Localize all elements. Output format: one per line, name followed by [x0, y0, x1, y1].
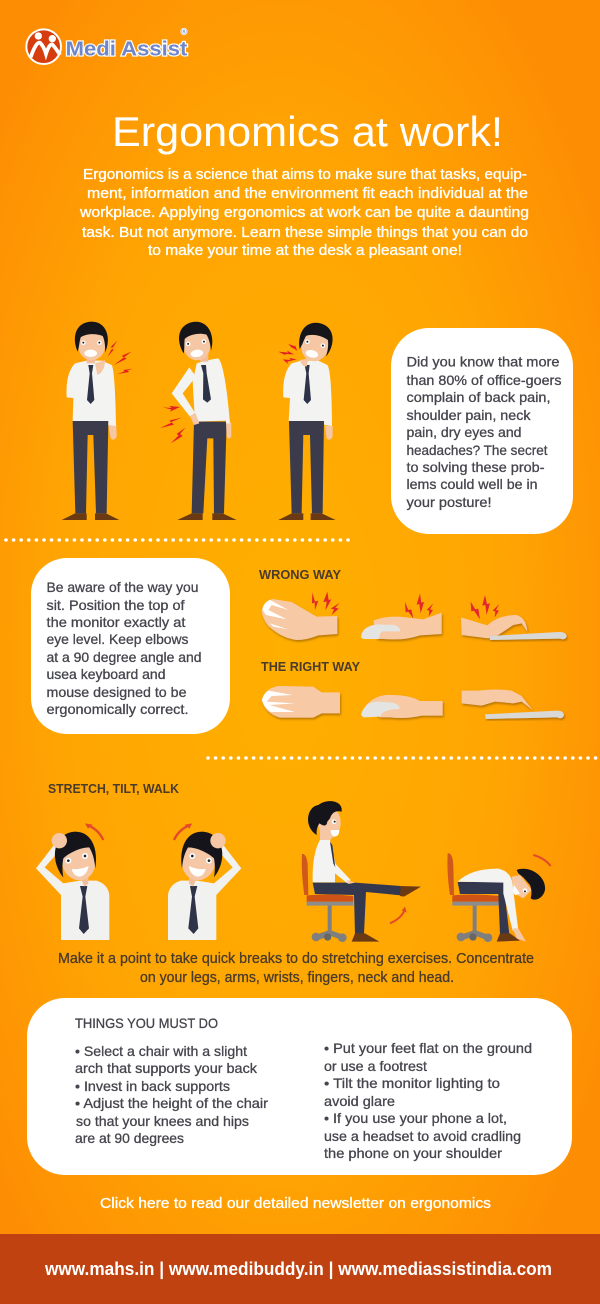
left list: so that your knees and hips — [76, 1113, 249, 1129]
callout bubble: did you know: your posture! — [406, 494, 492, 510]
wrong hand keyboard — [461, 595, 567, 640]
figure: tilt left — [168, 823, 241, 940]
callout bubble: did you know: to solving these prob- — [406, 459, 545, 475]
left list — [75, 1043, 268, 1146]
right list: • Put your feet flat on the ground — [324, 1040, 532, 1056]
left list: • Adjust the height of the chair — [75, 1095, 268, 1111]
left list: arch that supports your back — [75, 1060, 258, 1076]
intro text: task. But not anymore. Learn these simple things that you can do — [82, 224, 528, 241]
right list: use a headset to avoid cradling — [324, 1128, 521, 1144]
right list: avoid glare — [324, 1093, 395, 1109]
heading: wrong way: WRONG WAY — [259, 567, 341, 582]
left list: are at 90 degrees — [75, 1130, 184, 1146]
callout bubble: did you know — [391, 328, 573, 534]
bubble: sitting advice — [31, 558, 230, 734]
intro text: to make your time at the desk a pleasant one! — [148, 242, 462, 259]
bubble: sitting advice: at a 90 degree angle and — [46, 649, 202, 665]
figure: toe touch — [447, 853, 551, 942]
callout bubble: did you know: Did you know that more — [406, 354, 560, 370]
bubble: sitting advice: Be aware of the way you — [46, 579, 198, 595]
right list: the phone on your shoulder — [324, 1145, 502, 1161]
standing figures in pain — [62, 319, 336, 520]
heading: stretch, tilt, walk: STRETCH, TILT, WALK — [48, 781, 180, 796]
right list — [324, 1040, 532, 1161]
left list: • Invest in back supports — [75, 1078, 230, 1094]
figure: tilt right — [36, 823, 109, 940]
bubble: sitting advice: mouse designed to be — [46, 684, 187, 700]
logo: ® — [181, 28, 187, 37]
logo: Medi Assist — [66, 38, 187, 61]
right list: • Tilt the monitor lighting to — [324, 1075, 500, 1091]
figure: back pain — [160, 320, 237, 520]
callout bubble: did you know: shoulder pain, neck — [406, 407, 532, 423]
wrong hand flat — [262, 592, 340, 640]
callout bubble: did you know: complain of back pain, — [406, 389, 550, 405]
wrong hand mouse — [361, 593, 442, 639]
bubble: sitting advice: eye level. Keep elbows — [46, 631, 188, 647]
callout bubble: did you know: than 80% of office-goers — [406, 372, 562, 388]
callout bubble: did you know: lems could well be in — [406, 476, 538, 492]
bubble: sitting advice: sit. Position the top of — [46, 597, 185, 613]
intro text — [79, 166, 529, 259]
callout bubble: did you know: headaches? The secret — [406, 442, 548, 458]
intro text: ment, information and the environment fit each individual at the — [87, 185, 528, 202]
bubble: sitting advice: the monitor exactly at — [46, 614, 186, 630]
hand illustrations — [262, 592, 567, 719]
logo — [26, 28, 187, 64]
bubble: sitting advice: usea keyboard and — [46, 666, 166, 682]
footer — [0, 1234, 600, 1304]
right hand mouse — [361, 695, 443, 718]
footer: www.mahs.in | www.medibuddy.in | www.mediassistindia.com — [44, 1259, 552, 1279]
intro text: workplace. Applying ergonomics at work can be quite a daunting — [79, 204, 529, 221]
panel: things you must do — [27, 998, 572, 1175]
right hand flat — [262, 686, 340, 718]
seated stretch figures — [302, 801, 551, 942]
right hand keyboard — [462, 689, 564, 719]
panel heading: THINGS YOU MUST DO — [75, 1015, 218, 1031]
figure: neck pain — [62, 322, 133, 520]
stretching caption: Make it a point to take quick breaks to do stretching exercises. Concentrate — [58, 951, 534, 967]
newsletter link: Click here to read our detailed newsletter on ergonomics — [100, 1195, 491, 1212]
figure: shoulder pain — [278, 319, 336, 520]
heading: the right way: THE RIGHT WAY — [261, 659, 360, 674]
neck stretch figures — [36, 823, 241, 940]
stretching caption: on your legs, arms, wrists, fingers, neck and head. — [140, 970, 454, 986]
right list: or use a footrest — [324, 1058, 427, 1074]
stretching caption — [58, 951, 534, 986]
title: Ergonomics at work! — [112, 108, 503, 155]
figure: leg stretch — [302, 801, 421, 942]
bubble: sitting advice: ergonomically correct. — [46, 701, 188, 717]
intro text: Ergonomics is a science that aims to make sure that tasks, equip- — [83, 166, 527, 183]
right list: • If you use your phone a lot, — [324, 1110, 507, 1126]
callout bubble: did you know: pain, dry eyes and — [406, 424, 522, 440]
left list: • Select a chair with a slight — [75, 1043, 247, 1059]
